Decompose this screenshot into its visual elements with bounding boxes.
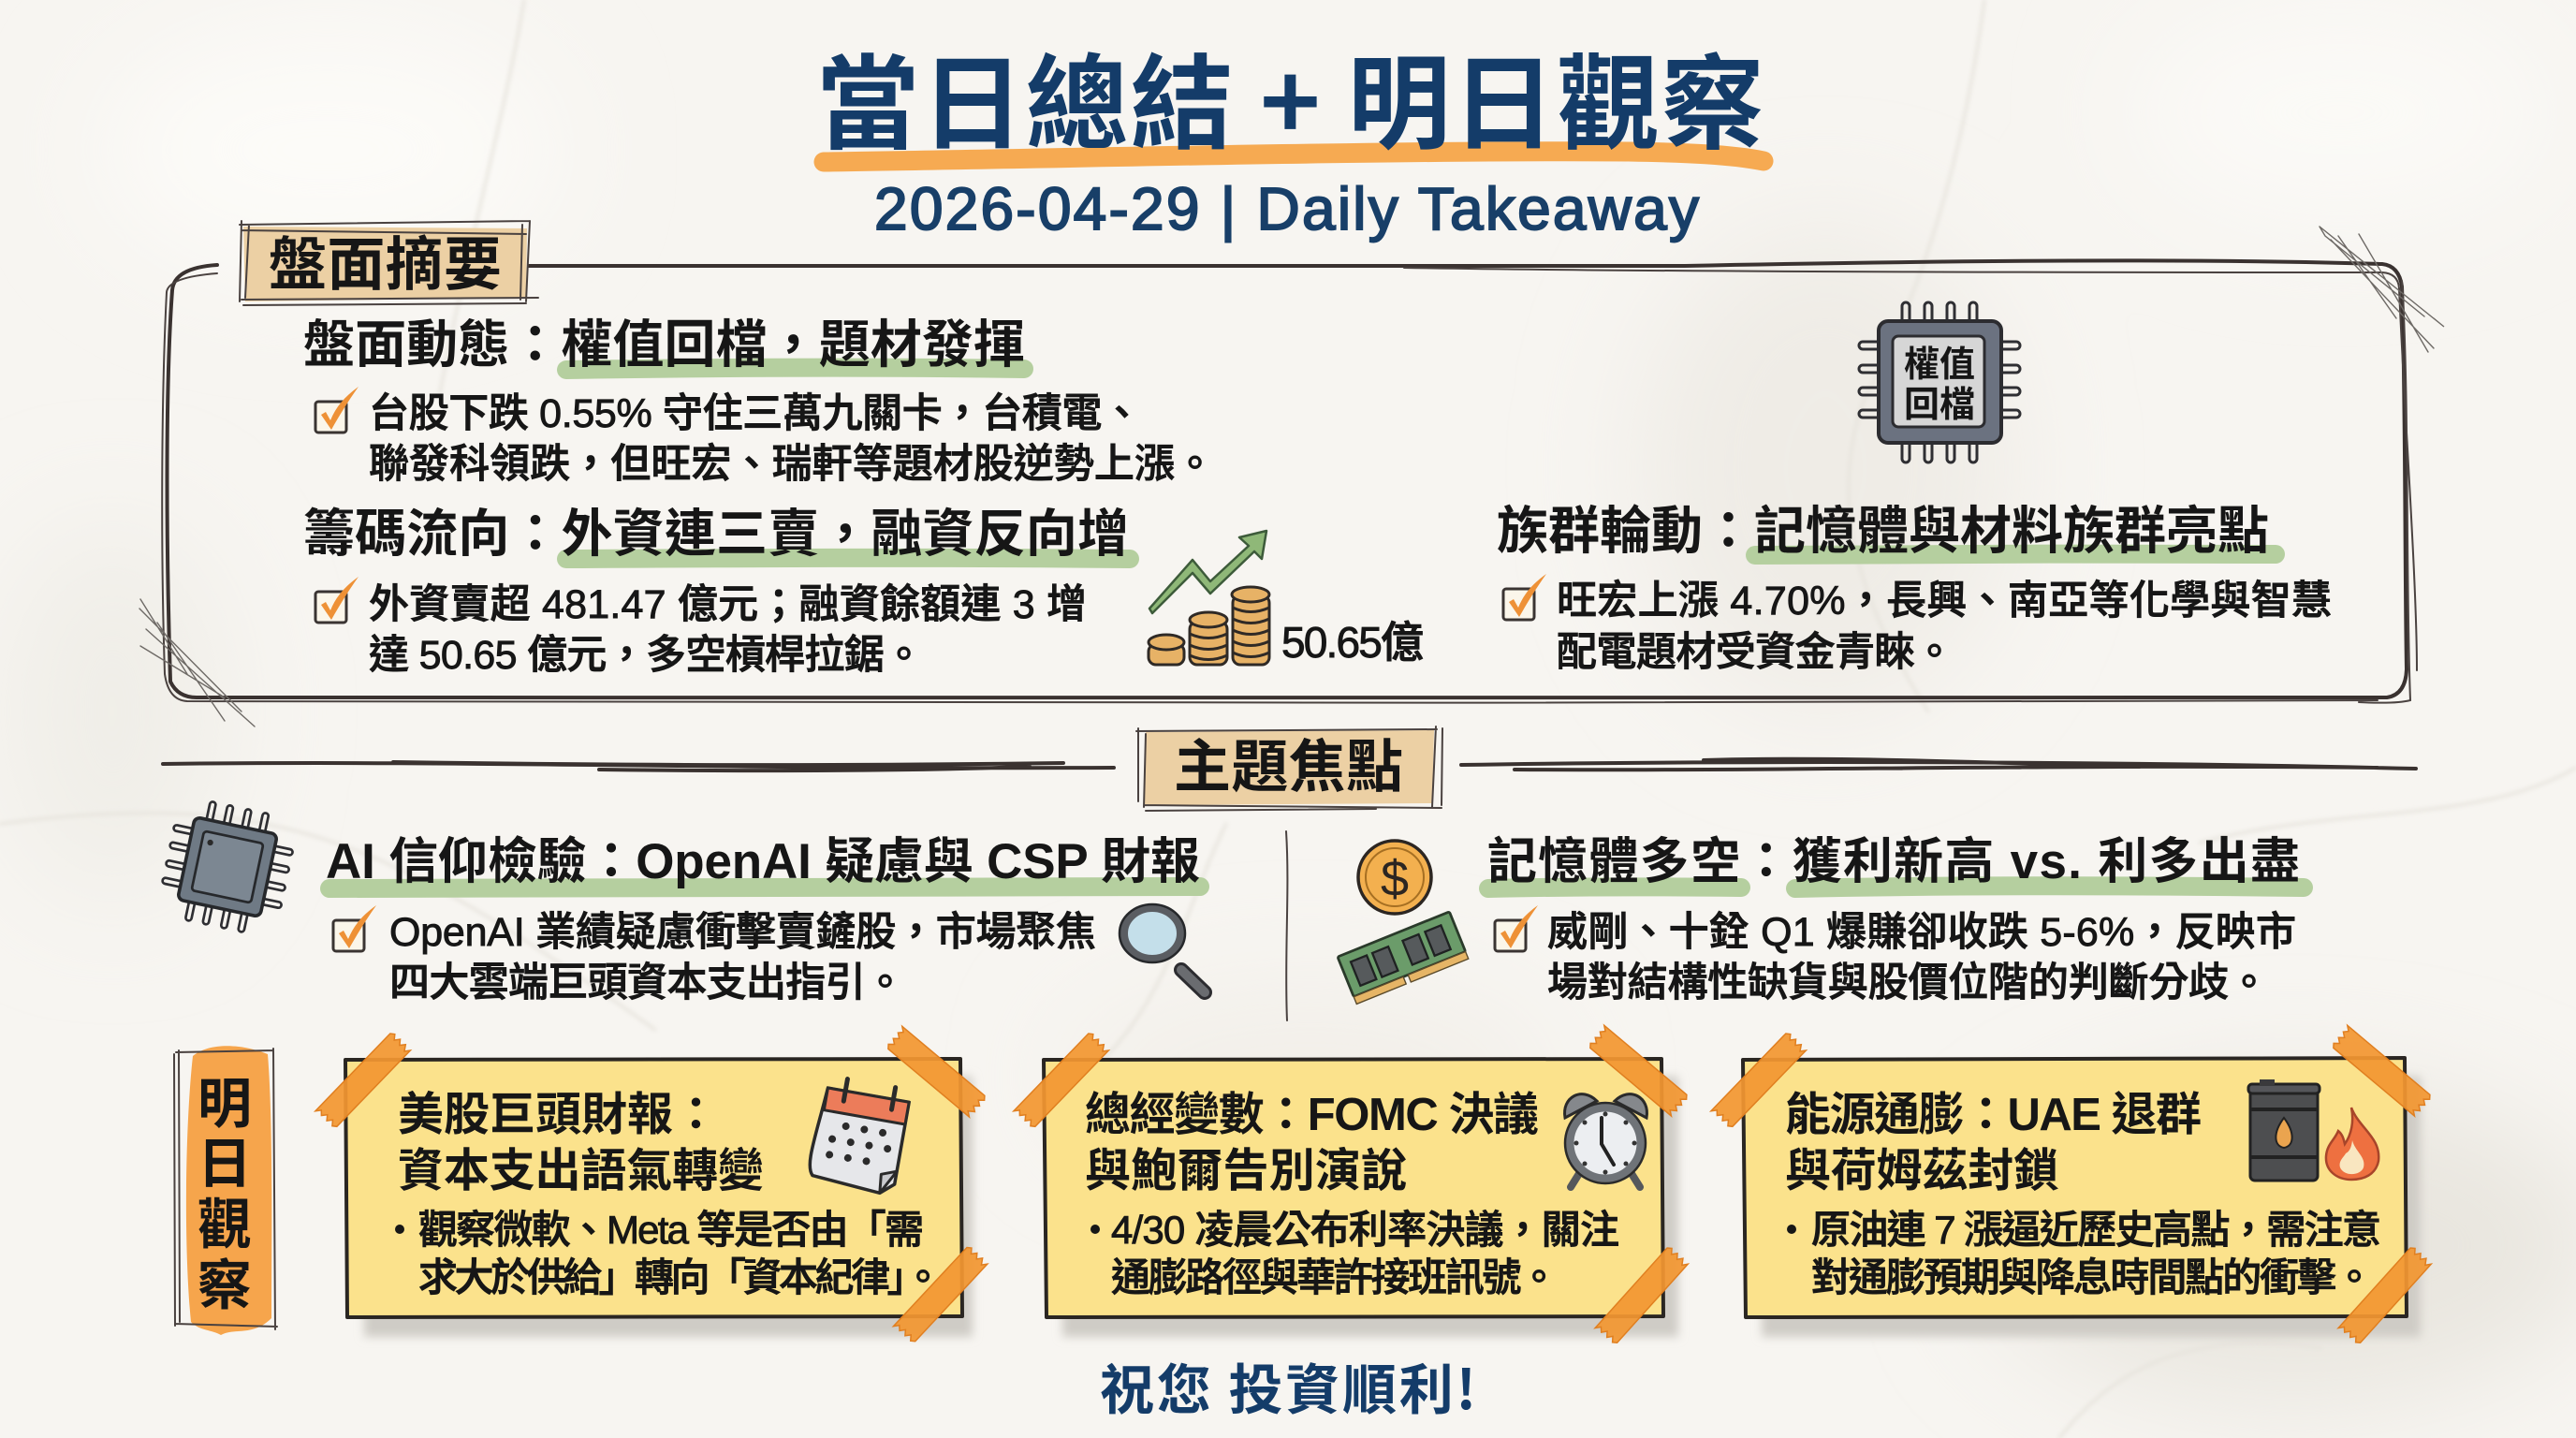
note card: 總經變數 (1014, 1025, 1689, 1345)
text: 族群輪動 body: 配電題材受資金青睞。 (1557, 630, 1954, 675)
tag: 盤面摘要: 盤面摘要 (269, 217, 502, 301)
icon: checkbox (315, 387, 359, 433)
section: 記憶體多空 (1338, 834, 2304, 1005)
text: 總經變數 body: 4/30 凌晨公布利率決議，關注 (1111, 1208, 1619, 1252)
side label: 明日觀察: 日 (198, 1120, 252, 1198)
section: AI 信仰檢驗 (155, 795, 1205, 1005)
heading: 總經變數: 與鮑爾告別演說 (1085, 1146, 1407, 1196)
icon: checkbox (1495, 905, 1538, 951)
icon: chip 權值回檔 (1859, 302, 2020, 462)
text: AI 信仰檢驗 body: OpenAI 業績疑慮衝擊賣鏟股，市場聚焦 (389, 910, 1096, 955)
icon: calendar (807, 1075, 911, 1196)
icon: checkbox (333, 905, 376, 951)
text: 能源通膨 body (1787, 1208, 2381, 1299)
section: 籌碼流向 (303, 505, 1424, 678)
text: 總經變數 body (1090, 1208, 1619, 1299)
section: 盤面動態 (303, 315, 1215, 487)
heading: AI 信仰檢驗: AI 信仰檢驗：OpenAI 疑慮與 CSP 財報 (326, 834, 1200, 889)
text: 盤面動態 body: 聯發科領跌，但旺宏、瑞軒等題材股逆勢上漲。 (369, 442, 1215, 487)
section divider right (1461, 759, 2416, 770)
side label: 明日觀察: 察 (198, 1241, 252, 1320)
text: 族群輪動 body: 旺宏上漲 4.70%，長興、南亞等化學與智慧 (1557, 579, 2332, 624)
heading: 美股巨頭財報: 美股巨頭財報： (398, 1090, 719, 1140)
text: 記憶體多空 body: 場對結構性缺貨與股價位階的判斷分歧。 (1547, 961, 2269, 1005)
icon: flame (2326, 1108, 2378, 1180)
heading: 美股巨頭財報 (398, 1090, 764, 1196)
icon: checkbox (1503, 574, 1546, 620)
text: AI 信仰檢驗 body (389, 910, 1096, 1005)
tapes (1711, 1025, 2432, 1345)
text: 總經變數 body: 通膨路徑與華許接班訊號。 (1111, 1255, 1559, 1299)
icon: dollar coin (1358, 841, 1431, 914)
text: 盤面動態 body (369, 391, 1215, 487)
icon: chip 權值回檔: 權值 (1904, 335, 1975, 387)
heading: 總經變數 (1085, 1090, 1539, 1196)
heading: 盤面動態: 盤面動態：權值回檔，題材發揮 (303, 315, 1025, 374)
tapes (1014, 1025, 1689, 1345)
panel: 盤面摘要 (139, 217, 2444, 726)
section: 族群輪動 (1497, 502, 2332, 675)
text: AI 信仰檢驗 body: 四大雲端巨頭資本支出指引。 (389, 961, 905, 1005)
heading: 能源通膨: 能源通膨：UAE 退群 (1785, 1090, 2202, 1140)
footer message: 祝您 投資順利! (1100, 1346, 1476, 1425)
title: 當日總結 + 明日觀察 (816, 21, 1764, 170)
text: 籌碼流向 body: 達 50.65 億元，多空槓桿拉鋸。 (369, 633, 924, 678)
text: 能源通膨 body: 對通膨預期與降息時間點的衝擊。 (1811, 1255, 2374, 1299)
icon: magnifying glass (1120, 904, 1205, 992)
panel frame (162, 260, 2417, 703)
side label: 明日觀察 (174, 1046, 277, 1335)
section divider left (163, 762, 1114, 770)
heading: 籌碼流向: 籌碼流向：外資連三賣，融資反向增 (303, 505, 1129, 563)
text: 美股巨頭財報 body: 求大於供給」轉向「資本紀律」。 (418, 1255, 943, 1299)
text: 籌碼流向 body: 外資賣超 481.47 億元；融資餘額連 3 增 (369, 582, 1087, 627)
text: 盤面動態 body: 台股下跌 0.55% 守住三萬九關卡，台積電、 (369, 391, 1142, 436)
icon: chip 權值回檔: 回檔 (1904, 375, 1975, 427)
vertical divider (1286, 831, 1287, 1020)
decorative scribble corners (139, 227, 2444, 726)
subtitle: 2026-04-29 | Daily Takeaway (874, 175, 1699, 242)
tag: 主題焦點 (1136, 720, 1442, 811)
text: 族群輪動 body (1557, 579, 2332, 675)
text: 記憶體多空 body: 威剛、十銓 Q1 爆賺卻收跌 5-6%，反映市 (1547, 910, 2296, 955)
text: 籌碼流向 body (369, 582, 1087, 678)
tapes (315, 1026, 988, 1344)
text: 美股巨頭財報 body (395, 1208, 943, 1299)
note card: 美股巨頭財報 (315, 1026, 988, 1344)
icon: coins with rising arrow (1149, 531, 1269, 665)
heading: 能源通膨: 與荷姆茲封鎖 (1785, 1146, 2059, 1196)
text: 美股巨頭財報 body: 觀察微軟、Meta 等是否由「需 (418, 1208, 924, 1252)
icon: dollar coin: $ (1381, 851, 1409, 907)
heading: 美股巨頭財報: 資本支出語氣轉變 (398, 1146, 764, 1196)
label: 50.65億: 50.65億 (1281, 618, 1424, 667)
icon: memory module (1338, 912, 1469, 1004)
icon: tilted chip (155, 795, 300, 939)
icon: checkbox (315, 577, 359, 623)
heading: 族群輪動: 族群輪動：記憶體與材料族群亮點 (1497, 502, 2269, 560)
heading: 總經變數: 總經變數：FOMC 決議 (1085, 1090, 1539, 1140)
note card: 能源通膨 (1711, 1025, 2432, 1345)
icon: oil barrel (2248, 1079, 2320, 1181)
side label: 明日觀察: 明 (198, 1060, 252, 1138)
heading: 記憶體多空: 記憶體多空：獲利新高 vs. 利多出盡 (1487, 834, 2300, 889)
tag: 主題焦點: 主題焦點 (1174, 720, 1403, 803)
side label: 明日觀察: 觀 (198, 1181, 252, 1259)
text: 能源通膨 body: 原油連 7 漲逼近歷史高點，需注意 (1811, 1208, 2381, 1252)
heading: 能源通膨 (1785, 1090, 2202, 1196)
icon: alarm clock (1565, 1094, 1647, 1187)
text: 記憶體多空 body (1547, 910, 2296, 1005)
